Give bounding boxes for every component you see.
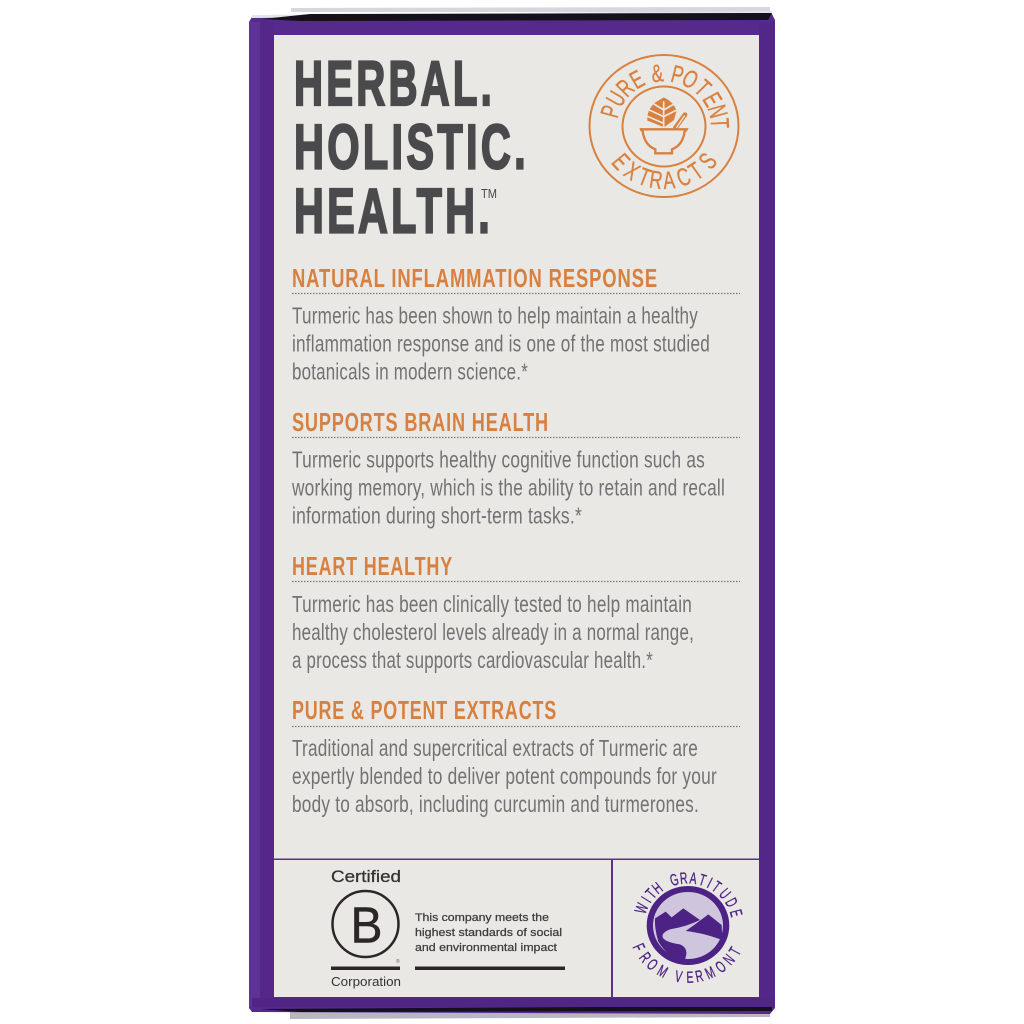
section: natural inflammation response: inflammation response and is one of the most studied <box>292 330 710 356</box>
logo: with gratitude from vermont: M <box>702 963 718 983</box>
logo: with gratitude from vermont: F <box>629 941 649 954</box>
logo: with gratitude from vermont: O <box>712 958 730 976</box>
title: HEALTH. <box>294 176 493 246</box>
b corp statement: highest standards of social <box>415 927 562 939</box>
b corp statement: This company meets the <box>415 912 549 924</box>
section: natural inflammation response <box>292 263 740 384</box>
badge: pure and potent extracts <box>590 55 738 197</box>
logo: certified b corporation: Corporation <box>331 974 401 989</box>
logo: with gratitude from vermont: I <box>637 893 655 906</box>
logo: with gratitude from vermont: E <box>726 907 747 919</box>
badge: pure and potent extracts: T <box>705 117 735 129</box>
badge: pure and potent extracts: T <box>634 163 654 192</box>
b corp statement: and environmental impact <box>415 942 557 954</box>
logo: with gratitude from vermont: O <box>643 956 662 974</box>
box: purple front <box>249 11 775 1014</box>
logo: with gratitude from vermont <box>629 869 747 986</box>
badge: pure and potent extracts: P <box>594 102 626 121</box>
badge: pure and potent extracts: R <box>648 166 664 195</box>
logo: with gratitude from vermont: I <box>704 874 715 892</box>
section: supports brain health <box>291 407 740 528</box>
section: pure and potent extracts: expertly blended to deliver potent compounds for your <box>292 763 717 789</box>
section: pure and potent extracts: Traditional and supercritical extracts of Turmeric are <box>292 735 698 761</box>
logo: with gratitude from vermont: N <box>719 950 739 968</box>
badge: pure and potent extracts: R <box>610 73 640 102</box>
badge: pure and potent extracts: U <box>600 86 632 111</box>
title <box>294 49 529 246</box>
logo: with gratitude from vermont: T <box>641 885 660 902</box>
section: supports brain health: SUPPORTS BRAIN HEALTH <box>292 407 549 437</box>
logo: with gratitude from vermont: D <box>721 895 742 910</box>
badge: pure and potent extracts: T <box>689 74 717 102</box>
section: pure and potent extracts <box>292 695 740 817</box>
section: supports brain health: Turmeric supports healthy cognitive function such as <box>292 446 705 472</box>
b corp statement <box>415 912 565 970</box>
panel: cream label <box>274 35 759 997</box>
badge: pure and potent extracts: E <box>606 148 636 175</box>
badge: pure and potent extracts: A <box>662 166 677 195</box>
logo: with gratitude from vermont: G <box>668 870 681 890</box>
footer dividers <box>274 858 759 998</box>
logo: with gratitude from vermont: R <box>694 967 705 986</box>
badge: pure and potent extracts: & <box>650 59 665 88</box>
icon: mountains and river <box>655 908 722 961</box>
logo: with gratitude from vermont: V <box>673 967 684 986</box>
badge: pure and potent extracts: P <box>668 60 687 90</box>
badge: pure and potent extracts: S <box>692 147 723 174</box>
logo: with gratitude from vermont: T <box>708 878 725 896</box>
badge: pure and potent extracts: O <box>677 63 703 95</box>
section: heart healthy: Turmeric has been clinically tested to help maintain <box>292 591 692 617</box>
badge: pure and potent extracts: E <box>697 87 728 111</box>
section: heart healthy: healthy cholesterol levels already in a normal range, <box>292 619 694 645</box>
section: heart healthy: HEART HEALTHY <box>292 551 453 581</box>
logo: with gratitude from vermont: E <box>686 968 694 986</box>
section: pure and potent extracts: body to absorb, including curcumin and turmerones. <box>292 791 699 817</box>
logo: with gratitude from vermont: T <box>697 871 709 890</box>
title: TM <box>481 186 497 201</box>
box: back flaps <box>290 7 770 1019</box>
title: HOLISTIC. <box>294 112 529 182</box>
section: natural inflammation response: botanicals in modern science.* <box>292 358 528 384</box>
logo: certified b corporation: ® <box>396 958 400 965</box>
logo: with gratitude from vermont: A <box>689 869 698 888</box>
logo: certified b corporation: B <box>350 896 382 953</box>
logo: with gratitude from vermont: T <box>725 944 745 959</box>
logo: with gratitude from vermont: R <box>679 869 688 888</box>
badge: pure and potent extracts: E <box>624 64 649 95</box>
logo: certified b corporation: Certified <box>331 867 401 886</box>
section: heart healthy: a process that supports cardiovascular health.* <box>292 647 653 673</box>
section: heart healthy <box>292 551 740 673</box>
icon: leaf and mortar <box>641 97 687 153</box>
badge: pure and potent extracts: C <box>673 162 695 192</box>
section: natural inflammation response: NATURAL INFLAMMATION RESPONSE <box>292 263 658 293</box>
section: pure and potent extracts: PURE & POTENT EXTRACTS <box>292 695 557 725</box>
logo: with gratitude from vermont: R <box>635 949 656 966</box>
logo: with gratitude from vermont: M <box>654 962 671 981</box>
logo: with gratitude from vermont: U <box>715 884 735 902</box>
title: HERBAL. <box>294 49 495 119</box>
section: supports brain health: working memory, which is the ability to retain and recall <box>291 474 725 500</box>
logo: certified b corporation <box>331 867 401 989</box>
badge: pure and potent extracts: T <box>683 156 709 186</box>
badge: pure and potent extracts: X <box>619 156 645 186</box>
badge: pure and potent extracts: N <box>702 102 734 121</box>
logo: with gratitude from vermont: H <box>649 879 666 897</box>
section: natural inflammation response: Turmeric has been shown to help maintain a healthy <box>292 302 698 328</box>
logo: with gratitude from vermont: W <box>630 900 652 916</box>
section: supports brain health: information during short-term tasks.* <box>292 502 582 528</box>
